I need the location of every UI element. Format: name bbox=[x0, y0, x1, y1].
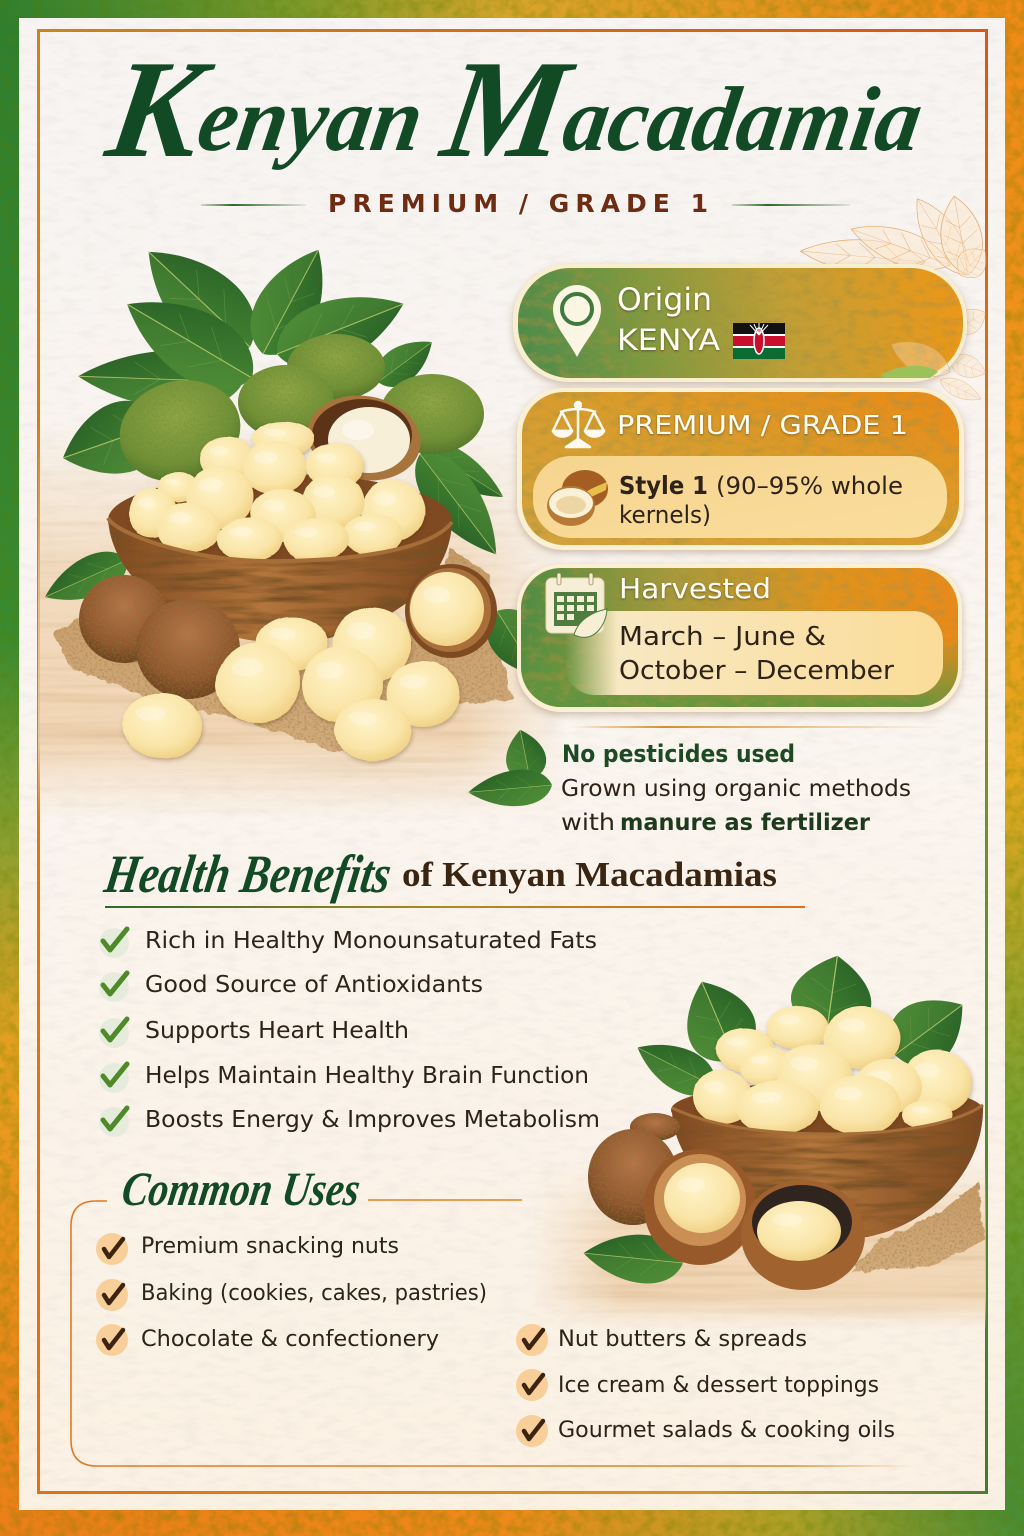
list: uses right: Ice cream & dessert toppings bbox=[558, 1373, 879, 1398]
icon: location pin bbox=[553, 285, 601, 357]
illustration: small bowl with cracked nuts bbox=[530, 950, 986, 1330]
nut half in dark shell bbox=[741, 1180, 865, 1290]
leaf bbox=[581, 1229, 685, 1287]
icon: small leaves in card bbox=[880, 331, 956, 385]
heading: common uses: Common Uses bbox=[118, 1163, 364, 1216]
icon: balance scale bbox=[553, 402, 604, 447]
bowl front bbox=[672, 1105, 983, 1237]
illustration: macadamia bowl with fruit and leaves bbox=[37, 226, 568, 820]
loose kernels bbox=[122, 608, 460, 761]
bowl front bbox=[108, 518, 452, 643]
panel border bbox=[71, 1200, 915, 1466]
origin text bbox=[617, 282, 720, 357]
small leaf bbox=[476, 598, 557, 687]
title: enyan bbox=[191, 70, 452, 171]
title: K bbox=[96, 32, 221, 187]
subtitle: PREMIUM / GRADE 1 bbox=[328, 189, 708, 218]
open shell with white kernel bbox=[301, 387, 427, 489]
list: uses right: Gourmet salads & cooking oils bbox=[558, 1418, 895, 1443]
heading: health benefits bbox=[100, 844, 805, 908]
origin text: Origin bbox=[617, 282, 712, 318]
origin text: KENYA bbox=[617, 323, 720, 357]
title: M bbox=[432, 32, 583, 187]
leaves behind bbox=[37, 226, 516, 615]
green fruits bbox=[108, 334, 484, 495]
list: health benefits: Helps Maintain Healthy Brain Function bbox=[145, 1063, 589, 1089]
list: health benefits: Good Source of Antioxidants bbox=[145, 972, 483, 998]
pesticide text: No pesticides used bbox=[562, 740, 795, 768]
list: health benefits: Rich in Healthy Monounsaturated Fats bbox=[145, 928, 597, 954]
title bbox=[96, 32, 935, 187]
nut half in shell bbox=[644, 1149, 756, 1265]
burlap bbox=[52, 548, 512, 752]
list: uses left: Chocolate & confectionery bbox=[141, 1327, 439, 1352]
card: harvested bbox=[517, 564, 962, 712]
list: health benefits: Boosts Energy & Improves Metabolism bbox=[145, 1107, 600, 1133]
card: origin bbox=[513, 264, 967, 385]
harvested heading: Harvested bbox=[619, 572, 771, 605]
list: uses right: Nut butters & spreads bbox=[558, 1327, 807, 1352]
kernels in bowl bbox=[129, 421, 425, 562]
brown nuts bbox=[588, 1113, 680, 1225]
card: grade bbox=[517, 388, 964, 550]
wood table bbox=[38, 420, 568, 820]
list: uses left bbox=[96, 1233, 487, 1356]
halved nut in shell bbox=[405, 564, 497, 658]
no pesticides callout: Grown using organic methods bbox=[561, 776, 911, 802]
heading: health benefits: Health Benefits bbox=[100, 844, 395, 904]
icon: Kenya flag bbox=[733, 323, 785, 359]
style 1 inner panel: kernels) bbox=[619, 501, 711, 529]
grade heading: PREMIUM / GRADE 1 bbox=[617, 411, 908, 441]
harvest dates inner panel: March – June & bbox=[619, 622, 826, 652]
title: acadamia bbox=[557, 70, 929, 171]
list: health benefits: Supports Heart Health bbox=[145, 1018, 409, 1044]
list: health benefits bbox=[99, 928, 600, 1137]
list: uses left: Baking (cookies, cakes, pastries) bbox=[141, 1281, 487, 1306]
icon: cracked nut bbox=[547, 470, 608, 526]
whole brown nuts bbox=[79, 575, 240, 699]
heading: health benefits: of Kenyan Macadamias bbox=[402, 855, 777, 894]
list: uses right bbox=[516, 1324, 895, 1447]
no pesticides callout bbox=[467, 726, 940, 836]
style 1 inner panel bbox=[533, 456, 947, 538]
no pesticides callout: manure as fertilizer bbox=[620, 810, 871, 836]
bowl back bbox=[108, 474, 452, 566]
decorative line-art leaves bbox=[799, 190, 995, 407]
leaves bbox=[628, 950, 982, 1106]
no pesticides callout: with bbox=[561, 810, 615, 836]
panel: common uses bbox=[71, 1163, 915, 1466]
harvest dates inner panel: October – December bbox=[619, 656, 894, 686]
bowl back bbox=[671, 1082, 983, 1138]
icon: calendar with leaf bbox=[546, 573, 607, 637]
kernels bbox=[693, 1006, 972, 1135]
icon: green leaves bbox=[467, 726, 554, 810]
style 1 inner panel: (90–95% whole bbox=[716, 472, 903, 500]
harvest dates inner panel bbox=[565, 611, 943, 695]
style text: Style 1 bbox=[619, 471, 708, 500]
burlap bbox=[850, 1183, 984, 1272]
wood table bbox=[530, 1160, 986, 1330]
list: uses left: Premium snacking nuts bbox=[141, 1234, 399, 1259]
